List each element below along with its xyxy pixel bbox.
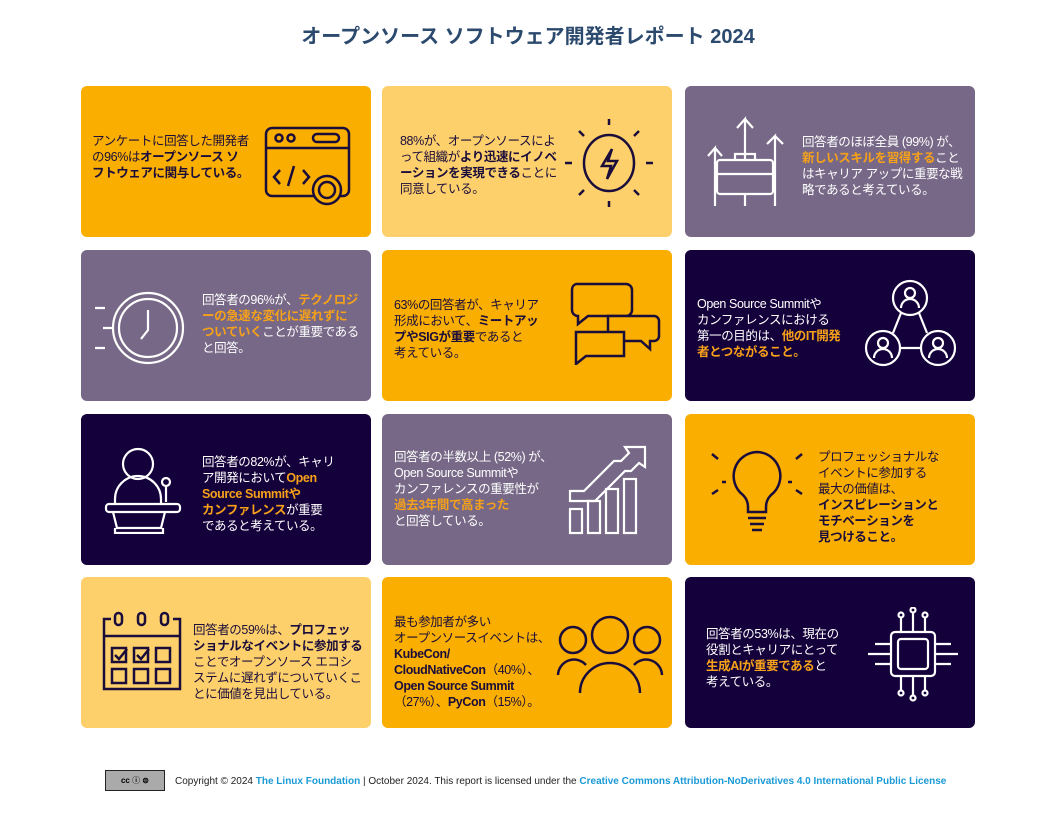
text block: インスピレーションと	[818, 498, 939, 512]
title: オープンソース ソフトウェア開発者レポート 2024	[301, 26, 755, 48]
text block	[818, 450, 939, 544]
text block: 回答者の82%が、キャリ	[202, 455, 334, 469]
text block: ことでオープンソース エコシ	[193, 655, 352, 669]
text block: モチベーションを	[818, 514, 915, 528]
text block: イベントに参加する	[818, 466, 927, 480]
text block: って組織がより迅速にイノベ	[400, 150, 556, 164]
text block: 回答者の半数以上 (52%) が、	[394, 450, 552, 464]
icon: growth chart	[568, 446, 646, 534]
icon: calendar	[102, 612, 182, 690]
text block: ショナルなイベントに参加する	[193, 639, 362, 653]
text block: と回答している。	[394, 514, 490, 528]
icon: speaker podium	[104, 448, 182, 534]
panel: inspiration	[685, 414, 975, 565]
text block	[92, 134, 249, 180]
text block: 63%の回答者が、キャリア	[394, 298, 539, 312]
panel: 63% meetups	[382, 250, 672, 401]
footer: Copyright © 2024 The Linux Foundation | October 2024. This report is licensed under the Creative Commons Attribution-NoDerivatives 4.0 International Public License	[175, 776, 946, 787]
icon: light bulb	[711, 450, 803, 532]
text block: アンケートに回答した開発者	[92, 134, 249, 148]
text block: 形成において、ミートアッ	[394, 314, 538, 328]
text block: 同意している。	[400, 182, 484, 196]
panel: connect with IT devs	[685, 250, 975, 401]
text block: はキャリア アップに重要な戦	[802, 167, 962, 181]
panel: most attended events	[382, 577, 672, 728]
text block	[802, 135, 962, 197]
text block: KubeCon/	[394, 647, 450, 661]
text block: フトウェアに関与している。	[92, 166, 249, 180]
text block: 生成AIが重要であると	[706, 659, 826, 673]
text block: （27%）、PyCon（15%）。	[394, 695, 539, 709]
panel: 96% involved	[81, 86, 371, 237]
text block: Open Source Summitや	[697, 297, 821, 311]
text block: であると考えている。	[202, 519, 322, 533]
panel: 99% new skills	[685, 86, 975, 237]
icon: briefcase arrows	[707, 116, 784, 206]
text block: ーの急速な変化に遅れずに	[202, 309, 347, 323]
panel: 82% OSS summit	[81, 414, 371, 565]
text block: とに価値を見出している。	[193, 687, 338, 701]
text block: 最も参加者が多い	[394, 615, 491, 629]
icon: browser code gear	[264, 126, 350, 206]
panel: 53% generative AI	[685, 577, 975, 728]
text block: ついていくことが重要である	[202, 325, 359, 339]
text block: プロフェッショナルな	[818, 450, 939, 464]
text block: Open Source Summitや	[394, 466, 518, 480]
text block: 役割とキャリアにとって	[706, 643, 838, 657]
text block	[697, 297, 840, 359]
text block: Open Source Summit	[394, 679, 514, 693]
text block: 略であると考えている。	[802, 183, 934, 197]
text block: プやSIGが重要であると	[394, 330, 523, 344]
text block	[400, 134, 557, 196]
text block: ーションを実現できることに	[400, 166, 557, 180]
text block: 回答者の53%は、現在の	[706, 627, 839, 641]
text block: 88%が、オープンソースによ	[400, 134, 555, 148]
text block: Source Summitや	[202, 487, 301, 501]
text block: 回答者の96%が、テクノロジ	[202, 293, 358, 307]
icon: CC license badge	[105, 770, 165, 791]
text block	[706, 627, 839, 689]
text block	[202, 293, 359, 355]
text block: 見つけること。	[818, 530, 903, 544]
text block: 者とつながること。	[697, 345, 805, 359]
panel: 52% importance grown	[382, 414, 672, 565]
text block	[394, 298, 539, 360]
text block: 第一の目的は、他のIT開発	[697, 329, 840, 343]
text block: カンファレンスにおける	[697, 313, 829, 327]
text block: 最大の価値は、	[818, 482, 903, 496]
text block: ア開発においてOpen	[202, 471, 317, 485]
text block: ステムに遅れずについていくこ	[193, 671, 362, 685]
text block: カンファレンスの重要性が	[394, 482, 539, 496]
text block: の96%はオープンソース ソ	[92, 150, 239, 164]
icon: CC license badge: cc ⓘ ⊜	[121, 776, 149, 785]
icon: network of people	[864, 280, 956, 366]
icon: group of people	[556, 616, 664, 693]
text block	[202, 455, 334, 533]
text block: カンファレンスが重要	[202, 503, 322, 517]
text block: と回答。	[202, 341, 250, 355]
icon: lightning sun	[565, 119, 653, 207]
icon: clock	[95, 292, 184, 364]
text block: CloudNativeCon（40%）、	[394, 663, 540, 677]
icon: chip	[868, 607, 958, 702]
text block: 過去3年間で高まった	[394, 498, 509, 512]
text block: オープンソースイベントは、	[394, 631, 550, 645]
panel: 88% innovation	[382, 86, 672, 237]
text block	[193, 623, 362, 701]
text block: 回答者のほぼ全員 (99%) が、	[802, 135, 960, 149]
icon: chat bubbles	[570, 282, 660, 365]
panel: 96% keep up	[81, 250, 371, 401]
text block: 回答者の59%は、プロフェッ	[193, 623, 350, 637]
text block	[394, 615, 550, 709]
text block	[394, 450, 552, 528]
text block: 考えている。	[706, 675, 778, 689]
text block: 考えている。	[394, 346, 466, 360]
panel: 59% professional events	[81, 577, 371, 728]
text block: 新しいスキルを習得すること	[802, 151, 959, 165]
